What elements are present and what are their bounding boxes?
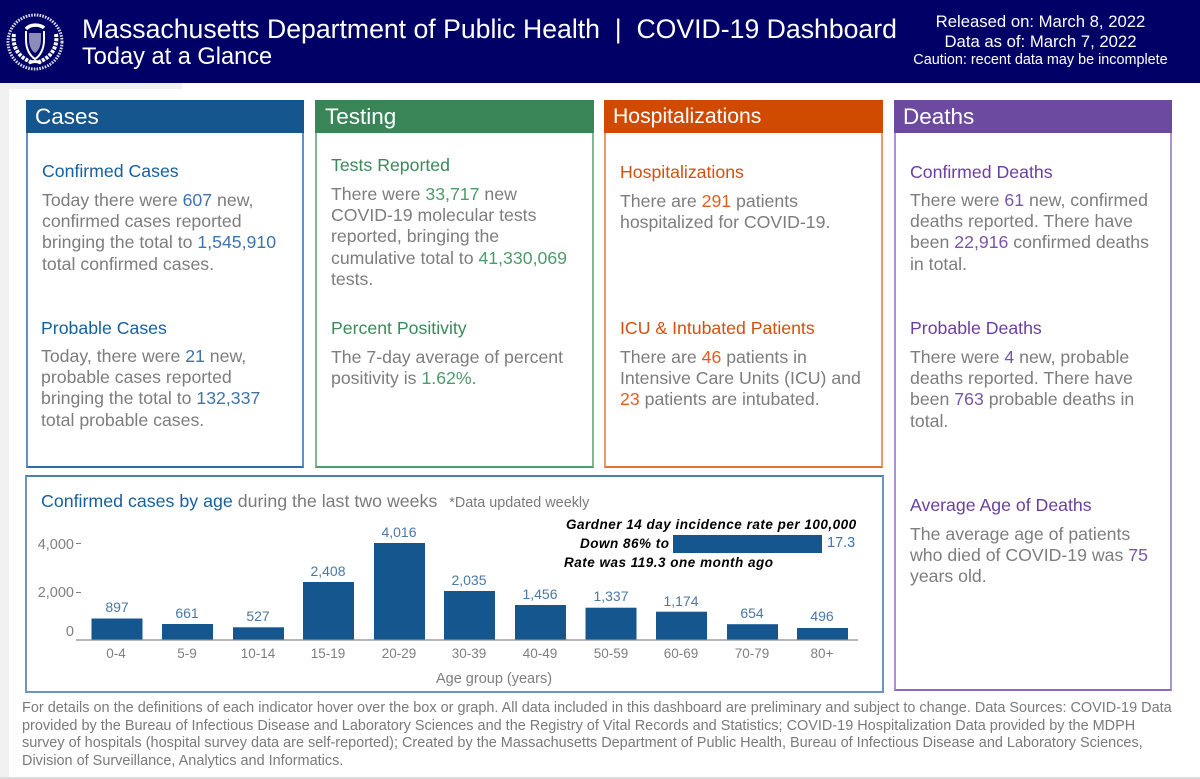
- panel: confirmed cases by age: [25, 475, 884, 693]
- probable deaths block: deaths reported. There have: [910, 368, 1133, 388]
- age group labels: 5-9: [177, 646, 197, 661]
- confirmed cases block: confirmed cases reported: [42, 211, 242, 231]
- probable cases block: bringing the total to 132,337: [41, 388, 260, 408]
- tests reported block: tests.: [331, 269, 373, 289]
- testing heading: Testing: [325, 104, 396, 129]
- testing heading: [315, 100, 594, 133]
- percent positivity block: positivity is 1.62%.: [331, 368, 477, 388]
- bar value labels: 897: [105, 599, 129, 615]
- bar value labels: 4,016: [381, 524, 417, 540]
- confirmed deaths block: deaths reported. There have: [910, 211, 1133, 231]
- probable deaths block: There were 4 new, probable: [910, 347, 1129, 367]
- callout bar: [673, 535, 822, 553]
- tests reported block: [331, 155, 567, 289]
- confirmed cases block: total confirmed cases.: [42, 254, 214, 274]
- age group labels: 70-79: [735, 646, 769, 661]
- title: Massachusetts Department of Public Health | COVID-19 Dashboard: [82, 14, 897, 44]
- age group labels: 15-19: [311, 646, 345, 661]
- average age block: Average Age of Deaths: [910, 495, 1092, 515]
- bar value labels: 496: [810, 608, 834, 624]
- age group labels: 50-59: [594, 646, 628, 661]
- deaths heading: Deaths: [903, 104, 974, 129]
- release information: Caution: recent data may be incomplete: [913, 52, 1168, 68]
- bars: [92, 543, 848, 640]
- icon: state health seal: [6, 14, 64, 70]
- background strip: top: [0, 83, 182, 89]
- release information: Released on: March 8, 2022: [936, 12, 1145, 31]
- cases heading: [26, 100, 304, 133]
- ICU and intubated block: There are 46 patients in: [620, 347, 807, 367]
- bar value labels: 1,174: [663, 593, 699, 609]
- average age block: years old.: [910, 566, 987, 586]
- confirmed deaths block: There were 61 new, confirmed: [910, 190, 1148, 210]
- confirmed deaths block: been 22,916 confirmed deaths: [910, 232, 1149, 252]
- percent positivity block: The 7-day average of percent: [331, 347, 563, 367]
- probable cases block: Today, there were 21 new,: [41, 346, 246, 366]
- ICU and intubated block: Intensive Care Units (ICU) and: [620, 368, 861, 388]
- y axis labels: 4,000: [38, 537, 74, 553]
- probable deaths block: Probable Deaths: [910, 318, 1042, 338]
- y axis labels: 0: [66, 624, 74, 640]
- percent positivity block: [331, 318, 563, 388]
- footnote: [22, 700, 1172, 768]
- footnote: Division of Surveillance, Analytics and Informatics.: [22, 752, 343, 768]
- probable cases block: total probable cases.: [41, 410, 204, 430]
- confirmed cases block: Today there were 607 new,: [42, 190, 253, 210]
- hospitalizations block: [620, 162, 830, 232]
- hospitalizations block: Hospitalizations: [620, 162, 744, 182]
- hospitalizations block: hospitalized for COVID-19.: [620, 212, 830, 232]
- deaths heading: [894, 100, 1172, 133]
- ICU and intubated block: [620, 318, 861, 409]
- callout headline: Gardner 14 day incidence rate per 100,000: [566, 517, 857, 532]
- bar chart: [38, 524, 858, 687]
- y axis labels: [38, 537, 74, 640]
- confirmed cases block: Confirmed Cases: [42, 161, 179, 181]
- footnote: provided by the Bureau of Infectious Disease and Laboratory Sciences and the Registry of Vital Records and Statistics; COVID-19 Hospitalization Data provided by the MDPH: [22, 718, 1135, 734]
- footnote: survey of hospitals (hospital survey data are self-reported); Created by the Massachusetts Department of Public Health, Bureau of Infectious Disease and Laboratory Sciences,: [22, 735, 1143, 751]
- age group labels: 80+: [811, 646, 834, 661]
- panel: hospitalizations: [604, 100, 883, 468]
- header band: [0, 0, 1200, 83]
- hospitalizations heading: [604, 100, 883, 133]
- bar value labels: 654: [740, 605, 764, 621]
- bar value labels: 2,408: [310, 563, 346, 579]
- axis line: [76, 639, 858, 641]
- callout previous rate: Rate was 119.3 one month ago: [564, 555, 774, 570]
- confirmed deaths block: [910, 162, 1149, 274]
- age group labels: 20-29: [382, 646, 416, 661]
- probable cases block: probable cases reported: [41, 367, 232, 387]
- hospitalizations heading: Hospitalizations: [613, 105, 761, 128]
- footnote: For details on the definitions of each indicator hover over the box or graph. All data included in this dashboard are preliminary and subject to change. Data Sources: COVID-19 Data: [22, 700, 1172, 716]
- background strip: left: [0, 83, 9, 777]
- average age block: The average age of patients: [910, 524, 1130, 544]
- bar value labels: 1,456: [522, 586, 558, 602]
- x axis title: Age group (years): [436, 671, 552, 687]
- confirmed cases block: bringing the total to 1,545,910: [42, 232, 276, 252]
- tests reported block: COVID-19 molecular tests: [331, 205, 536, 225]
- age group labels: [106, 646, 834, 661]
- bar value labels: [105, 524, 834, 624]
- probable deaths block: been 763 probable deaths in: [910, 389, 1134, 409]
- callout: Gardner incidence rate: [564, 517, 857, 570]
- percent positivity block: Percent Positivity: [331, 318, 467, 338]
- confirmed cases block: [42, 161, 276, 274]
- tests reported block: reported, bringing the: [331, 226, 499, 246]
- age group labels: 0-4: [106, 646, 126, 661]
- callout down label: Down 86% to: [580, 536, 670, 551]
- callout bar value: 17.3: [827, 535, 855, 551]
- y axis labels: 2,000: [38, 585, 74, 601]
- release information: Data as of: March 7, 2022: [944, 32, 1136, 50]
- confirmed deaths block: Confirmed Deaths: [910, 162, 1053, 182]
- release information: [913, 12, 1168, 68]
- confirmed deaths block: in total.: [910, 254, 967, 274]
- ICU and intubated block: 23 patients are intubated.: [620, 389, 820, 409]
- hospitalizations block: There are 291 patients: [620, 191, 798, 211]
- age group labels: 10-14: [241, 646, 276, 661]
- average age block: [910, 495, 1148, 586]
- cases heading: Cases: [35, 104, 99, 129]
- panel: deaths: [894, 100, 1172, 691]
- age group labels: 40-49: [523, 646, 557, 661]
- probable deaths block: total.: [910, 411, 948, 431]
- probable cases block: [41, 318, 260, 430]
- chart title: Confirmed cases by age during the last two weeks *Data updated weekly: [41, 491, 589, 511]
- background strip: bottom: [0, 777, 1200, 779]
- average age block: who died of COVID-19 was 75: [910, 545, 1148, 565]
- tests reported block: There were 33,717 new: [331, 184, 517, 204]
- bar value labels: 2,035: [451, 572, 487, 588]
- subtitle: Today at a Glance: [82, 44, 272, 70]
- age group labels: 60-69: [664, 646, 698, 661]
- bar value labels: 527: [246, 608, 270, 624]
- age group labels: 30-39: [452, 646, 486, 661]
- probable deaths block: [910, 318, 1134, 431]
- tests reported block: cumulative total to 41,330,069: [331, 248, 567, 268]
- panel: cases: [26, 100, 304, 468]
- ICU and intubated block: ICU & Intubated Patients: [620, 318, 815, 338]
- probable cases block: Probable Cases: [41, 318, 167, 338]
- bar value labels: 1,337: [593, 588, 629, 604]
- tests reported block: Tests Reported: [331, 155, 450, 175]
- panel: testing: [315, 100, 594, 468]
- bar value labels: 661: [175, 605, 199, 621]
